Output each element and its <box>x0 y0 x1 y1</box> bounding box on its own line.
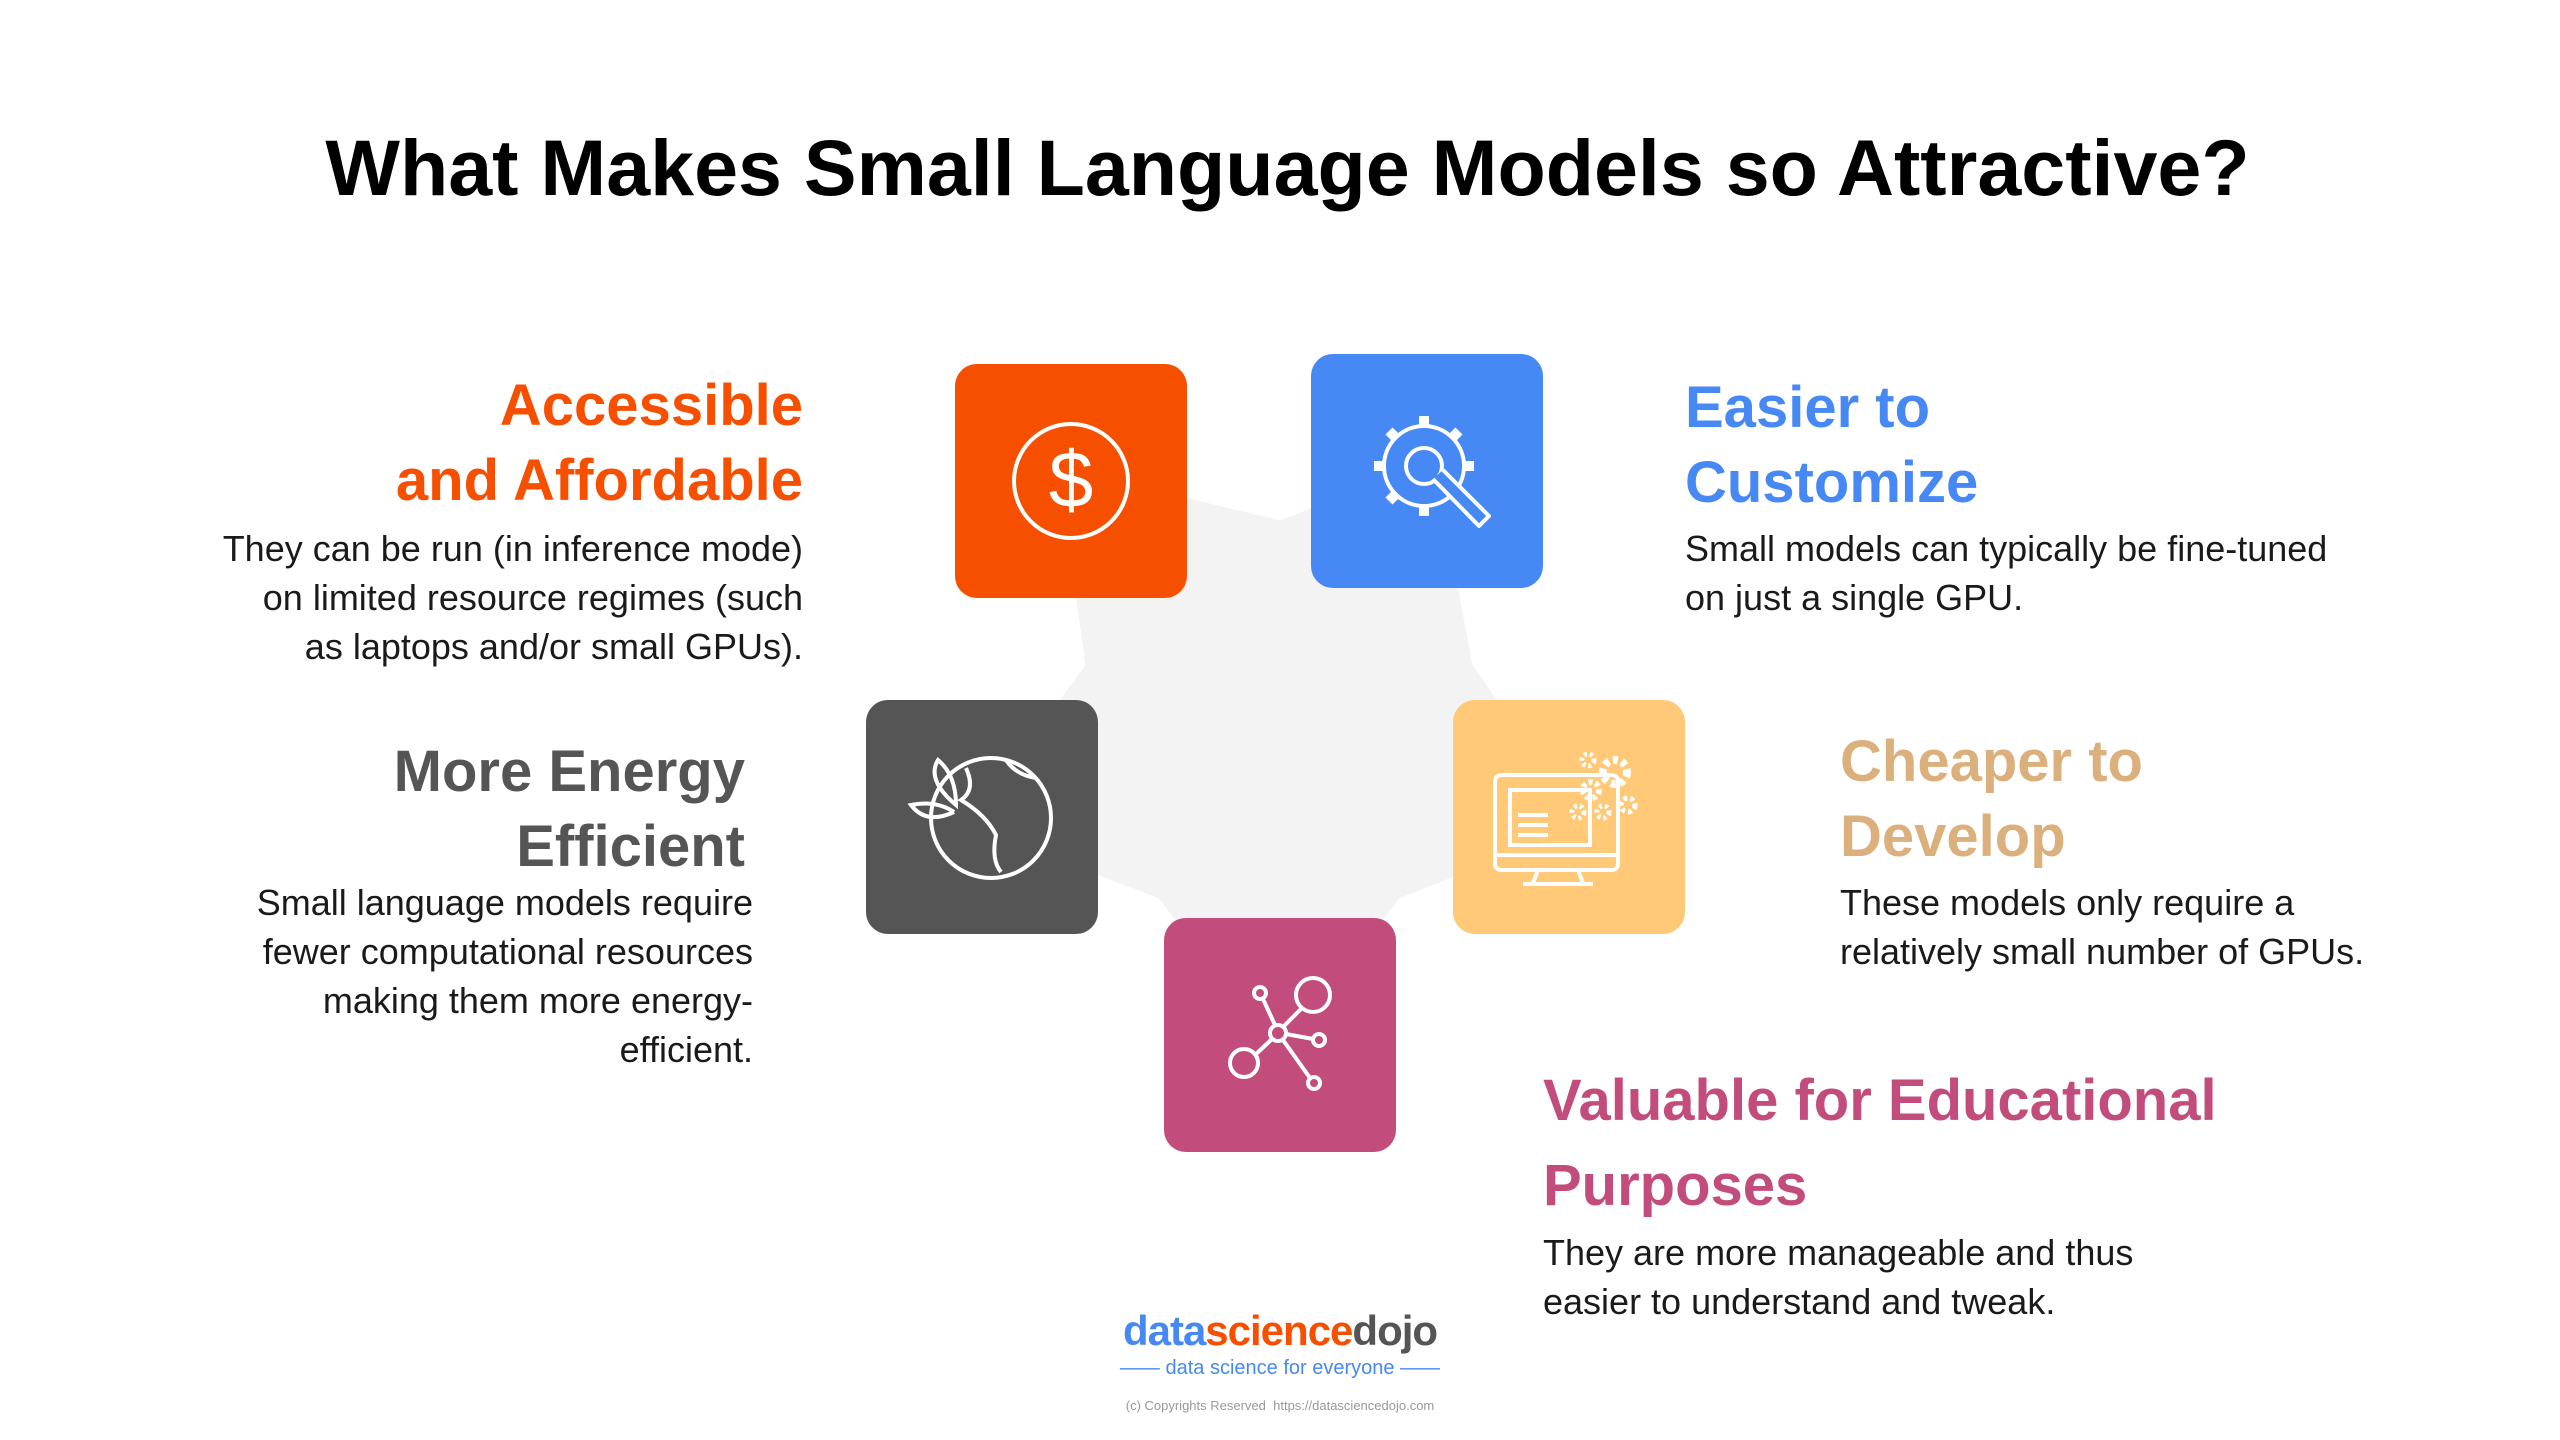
heading: More Energy Efficient <box>394 739 745 879</box>
text: customize body <box>1685 528 2327 618</box>
text: energy body: making them more energy- <box>323 980 753 1021</box>
heading: Accessible and Affordable: and Affordable <box>396 448 803 513</box>
text: educational body <box>1543 1232 2133 1322</box>
text: educational body: They are more manageable and thus <box>1543 1232 2133 1273</box>
heading: Valuable for Educational Purposes <box>1543 1068 2217 1218</box>
text: educational body: easier to understand and tweak. <box>1543 1281 2055 1322</box>
heading: Easier to Customize: Easier to <box>1685 375 1930 440</box>
text: energy body: fewer computational resources <box>263 931 753 972</box>
icon: dollar (orange) <box>955 364 1187 598</box>
logo: (c) Copyrights Reserved https://datasciencedojo.com <box>1126 1398 1434 1413</box>
title: What Makes Small Language Models so Attractive? <box>325 123 2250 212</box>
icon: network nodes (pink) <box>1164 918 1396 1152</box>
heading: Easier to Customize <box>1685 375 1978 515</box>
heading: More Energy Efficient: More Energy <box>394 739 745 804</box>
text: customize body: on just a single GPU. <box>1685 577 2023 618</box>
logo: —— data science for everyone —— <box>1120 1357 1440 1379</box>
heading: More Energy Efficient: Efficient <box>516 814 745 879</box>
heading: Cheaper to Develop <box>1840 729 2143 869</box>
text: accessible body: on limited resource regimes (such <box>263 577 803 618</box>
icon: globe (gray) <box>866 700 1098 934</box>
logo: datasciencedojo <box>1123 1307 1437 1354</box>
text: energy body: Small language models require <box>257 882 753 923</box>
icon: monitor with gears (yellow) <box>1453 700 1685 934</box>
logo <box>1120 1307 1440 1413</box>
text: cheaper body: relatively small number of GPUs. <box>1840 931 2364 972</box>
text: energy body <box>257 882 753 1070</box>
heading: Valuable for Educational Purposes: Valuable for Educational <box>1543 1068 2217 1133</box>
heading: Valuable for Educational Purposes: Purposes <box>1543 1153 1807 1218</box>
text: cheaper body <box>1840 882 2364 972</box>
text: accessible body <box>223 528 803 667</box>
heading: Cheaper to Develop: Develop <box>1840 804 2066 869</box>
heading: Easier to Customize: Customize <box>1685 450 1978 515</box>
heading: Accessible and Affordable <box>396 373 803 513</box>
heading: Cheaper to Develop: Cheaper to <box>1840 729 2143 794</box>
text: cheaper body: These models only require a <box>1840 882 2294 923</box>
text: accessible body: as laptops and/or small GPUs). <box>305 626 803 667</box>
text: accessible body: They can be run (in inference mode) <box>223 528 803 569</box>
text: energy body: efficient. <box>620 1029 753 1070</box>
heading: Accessible and Affordable: Accessible <box>500 373 803 438</box>
icon: gear wrench (blue) <box>1311 354 1543 588</box>
text: customize body: Small models can typically be fine-tuned <box>1685 528 2327 569</box>
icon: dollar (orange): $ <box>1049 435 1093 524</box>
